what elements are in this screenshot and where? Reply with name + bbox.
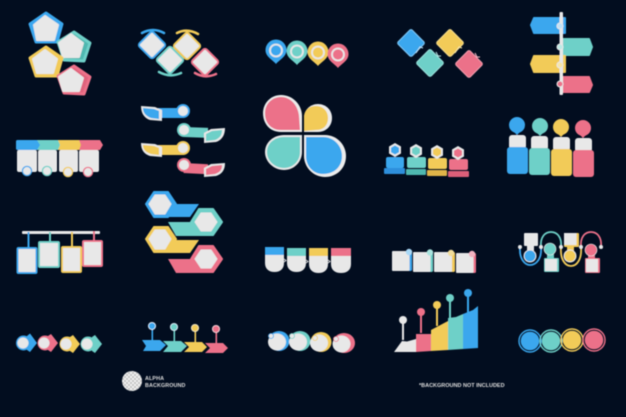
icon: alpha checkerboard circle <box>122 371 142 391</box>
pentagon cluster <box>30 13 90 94</box>
tilted note diamonds <box>397 29 483 78</box>
person columns <box>507 117 594 177</box>
hanging cards <box>18 231 102 273</box>
alpha background label: ALPHA <box>145 376 164 382</box>
alpha background label <box>145 376 186 389</box>
hexagon stands <box>384 143 469 177</box>
squares with corner dots <box>392 249 476 273</box>
arrow timeline with pins <box>142 322 228 353</box>
map pins row <box>266 40 348 68</box>
diamonds with arcs <box>138 30 219 76</box>
rising area chart with pins <box>394 289 478 352</box>
hexagon banners <box>146 192 222 273</box>
ringed circles row <box>519 329 605 352</box>
four-petal flower <box>263 95 346 177</box>
leaf banners with dots <box>141 104 225 177</box>
alpha background label: BACKGROUND <box>145 383 186 389</box>
circle arrows row <box>16 334 102 353</box>
shield cards <box>265 247 351 273</box>
blob speech bubbles <box>268 331 355 353</box>
background note: *BACKGROUND NOT INCLUDED <box>419 383 505 389</box>
header tabs with cards <box>16 140 103 177</box>
signposts timeline <box>531 12 592 95</box>
chain of linked nodes <box>518 232 603 273</box>
